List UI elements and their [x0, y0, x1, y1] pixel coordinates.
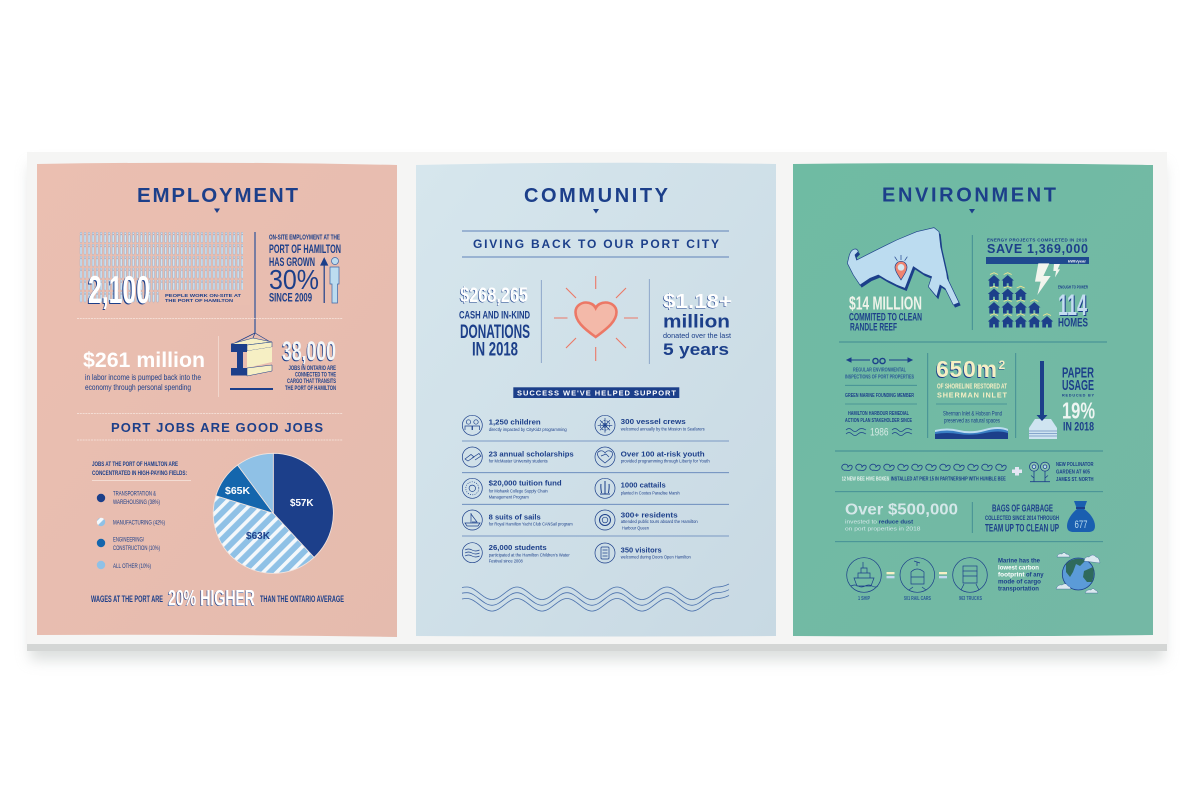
legend swatches	[97, 494, 105, 569]
icon: paper stack	[1029, 419, 1057, 439]
icon: children	[462, 415, 482, 435]
text: children: 1,250 children	[489, 419, 541, 426]
rules	[845, 385, 917, 404]
pictogram: workforce grid	[79, 232, 243, 304]
rule	[839, 341, 1107, 343]
stat: $261 million: $261 million	[83, 349, 205, 372]
text block: on-site growth: PORT OF HAMILTON	[269, 242, 341, 256]
caption: residents	[621, 519, 698, 531]
icon: homes	[988, 273, 1053, 328]
stat: 114 homes: HOMES	[1058, 316, 1088, 330]
stat: save energy: SAVE 1,369,000	[987, 242, 1088, 256]
stat: 14 million: RANDLE REEF	[850, 322, 897, 334]
text: bee hives: 12 NEW BEE HIVE BOXES	[842, 476, 889, 482]
stat: paper usage: 19%	[1062, 397, 1095, 423]
rule	[936, 403, 1007, 405]
item: youth	[595, 447, 710, 467]
text: marine footprint: of any	[1026, 572, 1044, 579]
callout: wages: THAN THE ONTARIO AVERAGE	[260, 594, 344, 604]
rule	[835, 541, 1103, 543]
text block: inspections	[845, 358, 917, 439]
comparison: trucks	[953, 558, 987, 602]
pie labels: $63K	[246, 531, 270, 542]
icon: water	[462, 543, 482, 563]
text: 1986: 1986	[870, 427, 888, 439]
comparison: rail	[900, 558, 935, 602]
caption: students: Festival since 2008	[489, 558, 523, 564]
stat: 1.18 million: $1.18+	[662, 292, 731, 314]
text: labor income: economy through personal spending	[85, 383, 191, 392]
text: pollinator garden: NEW POLLINATOR	[1056, 462, 1094, 468]
caption: cattails: planted in Cootes Paradise Marsh	[621, 490, 680, 496]
stat: 38,000 jobs: 38,000	[281, 337, 335, 367]
text: sails: 8 suits of sails	[489, 515, 541, 522]
legend labels: CONSTRUCTION (10%)	[113, 545, 160, 552]
heading marker	[593, 209, 599, 214]
stat: 114 homes: ENOUGH TO POWER	[1058, 285, 1088, 290]
caption: people on-site: PEOPLE WORK ON-SITE AT	[165, 293, 241, 299]
caption: students: participated at the Hamilton Children's Water	[489, 553, 570, 559]
icon: lightning	[1035, 263, 1060, 295]
text: bags of garbage	[985, 504, 1059, 535]
stat: 650 square metres: 2	[998, 358, 1005, 372]
text block: on-site growth: 30%	[269, 264, 319, 295]
item: students	[462, 543, 570, 564]
map: Hamilton harbour	[847, 228, 961, 308]
stat: donations 2018: $268,265	[459, 285, 528, 308]
item: residents	[595, 510, 698, 531]
comparison: ship	[847, 558, 881, 602]
arrow: growth up	[321, 258, 327, 303]
rule	[835, 491, 1103, 493]
pie labels	[225, 486, 314, 542]
caption: youth: provided programming through Liberty for Youth	[621, 459, 710, 465]
label: ship: 1 SHIP	[858, 596, 870, 602]
icon: garbage bag: 677	[1074, 519, 1088, 531]
text: inspections: HAMILTON HARBOUR REMEDIAL	[848, 411, 909, 417]
stat: donations 2018	[459, 284, 530, 360]
rule	[462, 230, 729, 232]
callout: wages: 20% HIGHER	[167, 586, 254, 611]
icon: garbage bag	[1067, 501, 1095, 532]
text: marine footprint: transportation	[998, 585, 1039, 592]
text: bags of garbage: BAGS OF GARBAGE	[992, 504, 1053, 515]
text: pollinator garden: JAMES ST. NORTH	[1056, 477, 1094, 483]
stat: paper usage: PAPER	[1062, 364, 1094, 381]
divider	[648, 279, 650, 364]
stat: 1.18 million: million	[663, 310, 730, 332]
stat: paper usage: REDUCED BY	[1062, 394, 1094, 398]
caption: tuition	[489, 488, 548, 500]
text: Sherman Inlet	[943, 410, 1002, 425]
icon: scholarship	[462, 447, 482, 467]
icon: globe with clouds	[1056, 552, 1100, 593]
divider	[77, 439, 343, 441]
icon: door	[595, 543, 615, 563]
panel background: employment	[37, 163, 397, 637]
stat: 1.18 million: donated over the last	[663, 331, 732, 340]
caption: people on-site	[165, 293, 241, 304]
caption: tuition: for Mohawk College Supply Chain	[489, 488, 548, 494]
heading: community: COMMUNITY	[524, 185, 669, 207]
bar: kWh per year: kWh/year	[1068, 260, 1087, 264]
stat: 650 square metres: 650m	[935, 357, 996, 383]
rule	[835, 450, 1103, 452]
caption: jobs in Ontario	[285, 366, 336, 392]
icon: heart with rays	[554, 276, 638, 361]
text: reduce dust: on port properties in 2018	[845, 526, 920, 532]
icon: bee hives	[842, 464, 1006, 471]
text: tuition: $20,000 tuition fund	[489, 480, 562, 487]
text: marine footprint: lowest carbon	[998, 564, 1039, 571]
icon: truck	[953, 558, 987, 592]
legend labels: MANUFACTURING (42%)	[113, 520, 165, 526]
stat: paper usage	[1062, 364, 1095, 434]
text: inspections	[845, 368, 915, 424]
icon: ship wheel	[595, 415, 615, 435]
stat: donations 2018: $268,265	[460, 284, 528, 307]
text: bags of garbage: TEAM UP TO CLEAN UP	[985, 523, 1059, 535]
text: pollinator garden: GARDEN AT 605	[1056, 470, 1091, 476]
waves	[846, 428, 912, 436]
item: tuition	[462, 478, 562, 500]
text: legend intro	[92, 461, 187, 477]
text block: on-site growth	[269, 232, 341, 304]
heading marker	[214, 208, 220, 213]
heading marker	[969, 209, 975, 214]
stat: 2,100 people: 2,100	[87, 270, 149, 313]
text: reduce dust	[845, 519, 920, 532]
divider	[77, 412, 343, 414]
stat: 650 square metres: 650m	[936, 356, 997, 382]
text: inspections: REGULAR ENVIRONMENTAL	[853, 368, 906, 374]
text: shoreline: SHERMAN INLET	[937, 391, 1008, 400]
caption: jobs in Ontario: CARGO THAT TRANSITS	[287, 379, 336, 385]
subheading: giving back: GIVING BACK TO OUR PORT CITY	[473, 237, 719, 251]
item: children	[462, 415, 567, 435]
legend labels: ENGINEERING/	[113, 536, 144, 544]
text: inspections: GREEN MARINE FOUNDING MEMBER	[845, 393, 915, 399]
pie labels: $57K	[290, 498, 314, 509]
item: visitors	[595, 543, 691, 563]
panel background: environment	[793, 163, 1153, 636]
item: crews	[595, 415, 705, 435]
icon: flowers	[1030, 462, 1050, 482]
item: scholarships	[462, 447, 574, 467]
text: bee hives	[842, 476, 1006, 482]
stat: 2,100 people: 2,100	[88, 269, 150, 312]
icon: life ring	[595, 510, 615, 530]
label: trucks: 963 TRUCKS	[959, 596, 982, 602]
icon: equals	[886, 572, 894, 578]
text: scholarships: 23 annual scholarships	[489, 451, 574, 458]
stat: 14 million: COMMITED TO CLEAN	[849, 312, 922, 324]
stat: 1.18 million: 5 years	[663, 340, 729, 359]
heading: employment: EMPLOYMENT	[137, 184, 298, 207]
folded paper sheet	[27, 152, 1167, 644]
icon: steel beam	[230, 333, 273, 390]
legend labels	[113, 490, 165, 570]
icon: sailboat	[462, 510, 482, 530]
panel: environment	[793, 163, 1153, 636]
icon: ship	[847, 558, 881, 592]
text: visitors: 350 visitors	[621, 547, 662, 554]
stat: 1.18 million: $1.18+	[663, 291, 732, 313]
stat: over 500,000: Over $500,000	[845, 501, 958, 518]
text: labor income	[85, 373, 201, 392]
label: rail: 501 RAIL CARS	[904, 596, 931, 602]
text: shoreline: OF SHORELINE RESTORED AT	[937, 382, 1007, 390]
text block: on-site growth: SINCE 2009	[269, 290, 312, 304]
text: marine footprint	[998, 558, 1044, 592]
text: energy projects: ENERGY PROJECTS COMPLETED IN 2018	[987, 238, 1087, 243]
text: bee hives: INSTALLED AT PIER 15 IN PARTNERSHIP WITH HUMBLE BEE	[891, 476, 1006, 482]
page shadow	[30, 165, 1164, 660]
text: students: 26,000 students	[489, 545, 547, 552]
divider	[927, 353, 929, 438]
stat: 114 homes: 114	[1058, 289, 1087, 322]
icon: plus	[1012, 467, 1022, 476]
text: youth: Over 100 at-risk youth	[621, 451, 705, 458]
divider	[92, 480, 191, 482]
pie labels: $65K	[225, 486, 250, 497]
banner: success: SUCCESS WE'VE HELPED SUPPORT	[517, 388, 676, 398]
text: cattails: 1000 cattails	[621, 482, 666, 489]
divider	[971, 502, 973, 533]
callout: wages: 20% HIGHER	[168, 586, 255, 610]
callout: wages: WAGES AT THE PORT ARE	[91, 594, 163, 604]
text: labor income: in labor income is pumped back into the	[85, 373, 201, 382]
caption: jobs in Ontario: THE PORT OF HAMILTON	[285, 386, 336, 392]
stat: 2,100 people	[87, 269, 150, 313]
divider	[971, 235, 973, 330]
wave decoration	[462, 584, 729, 611]
item: cattails	[595, 478, 680, 498]
caption: sails: for Royal Hamilton Yacht Club CANSail program	[489, 522, 573, 528]
bar: kWh per year	[986, 257, 1089, 264]
icon: map pin	[895, 255, 907, 280]
stat: 114 homes: 114	[1059, 290, 1088, 323]
panel background: community	[416, 163, 776, 636]
callout: wages	[91, 586, 344, 611]
pictogram mask	[160, 290, 250, 305]
fold shading	[27, 644, 1167, 651]
caption: people on-site: THE PORT OF HAMILTON	[165, 298, 234, 304]
stat: paper usage: USAGE	[1062, 377, 1094, 394]
item: sails	[462, 510, 573, 530]
stat: 650 square metres: 2	[998, 358, 1006, 372]
text: Sherman Inlet: preserved as natural spaces	[944, 418, 1000, 425]
text block: on-site growth: HAS GROWN	[269, 255, 315, 269]
house grid	[988, 275, 1053, 328]
icon: person	[330, 258, 339, 303]
caption: residents: attended public tours aboard the Hamilton	[621, 519, 698, 525]
text: reduce dust: invested to	[845, 519, 877, 525]
text: marine footprint: footprint	[998, 572, 1025, 579]
caption: tuition: Management Program	[489, 494, 529, 500]
caption: scholarships: for McMaster University students	[489, 459, 548, 465]
icon: train	[900, 558, 935, 592]
text: reduce dust: reduce dust	[879, 519, 913, 525]
heading: environment: ENVIRONMENT	[882, 185, 1056, 207]
text: legend intro: JOBS AT THE PORT OF HAMILTON ARE	[92, 461, 178, 468]
text: Sherman Inlet: Sherman Inlet & Hobson Pond	[943, 410, 1002, 417]
icon: water	[935, 427, 1008, 439]
icon: tuition	[462, 478, 482, 498]
stat: 114 homes	[1058, 285, 1088, 330]
caption: jobs in Ontario: JOBS IN ONTARIO ARE	[288, 366, 336, 372]
stat: donations 2018: DONATIONS	[460, 321, 530, 343]
stat: paper usage: IN 2018	[1063, 420, 1094, 434]
legend labels: TRANSPORTATION &	[113, 490, 156, 498]
panel: community	[416, 163, 776, 636]
stat: donations 2018: IN 2018	[472, 338, 518, 360]
text: marine footprint: mode of cargo	[998, 578, 1041, 585]
text: legend intro: CONCENTRATED IN HIGH-PAYING FIELDS:	[92, 470, 187, 477]
caption: crews: welcomed annually by the Mission to Seafarers	[621, 426, 705, 432]
icon: binoculars and arrows	[847, 358, 912, 364]
icon: cattails	[595, 478, 615, 498]
caption: students	[489, 553, 570, 564]
text: bags of garbage: COLLECTED SINCE 2014 THROUGH	[985, 515, 1059, 522]
stat: donations 2018: CASH AND IN-KIND	[459, 310, 530, 322]
caption: visitors: welcomed during Doors Open Hamilton	[621, 554, 691, 560]
stat: 14 million: $14 MILLION	[849, 293, 922, 313]
caption: jobs in Ontario: CONNECTED TO THE	[295, 372, 336, 378]
heading: port jobs: PORT JOBS ARE GOOD JOBS	[111, 420, 323, 435]
row rules	[462, 441, 729, 536]
text: residents: 300+ residents	[621, 512, 678, 519]
text: marine footprint: Marine has the	[998, 558, 1040, 565]
stat: 38,000 jobs	[281, 336, 336, 367]
caption: residents: Harbour Queen	[622, 525, 649, 531]
rule	[462, 256, 729, 258]
house roof highlights	[990, 273, 1051, 316]
stat: 1.18 million	[662, 291, 732, 359]
stat: 38,000 jobs: 38,000	[282, 336, 336, 366]
icon: equals	[939, 572, 947, 578]
text block: on-site growth: ON-SITE EMPLOYMENT AT THE	[269, 232, 340, 241]
legend labels: WAREHOUSING (38%)	[113, 499, 160, 506]
arrow: paper usage down	[1036, 361, 1048, 421]
legend labels: ALL OTHER (10%)	[113, 563, 151, 570]
text: shoreline	[937, 382, 1008, 400]
divider	[77, 318, 343, 320]
panel: employment	[37, 163, 397, 637]
text: pollinator garden	[1056, 462, 1094, 483]
divider	[540, 280, 542, 363]
icon: hands heart	[595, 447, 615, 467]
text: crews: 300 vessel crews	[621, 419, 686, 426]
pie chart: job fields	[213, 453, 333, 573]
caption: children: directly impacted by CityKidz programming	[489, 427, 567, 433]
legend	[97, 490, 165, 570]
text: inspections: ACTION PLAN STAKEHOLDER SINCE	[845, 418, 912, 424]
crane cable	[254, 232, 256, 333]
stat: 14 million	[849, 293, 922, 334]
divider	[218, 336, 220, 397]
divider	[1015, 353, 1017, 438]
text: inspections: INSPECTIONS OF PORT PROPERTIES	[845, 375, 914, 381]
